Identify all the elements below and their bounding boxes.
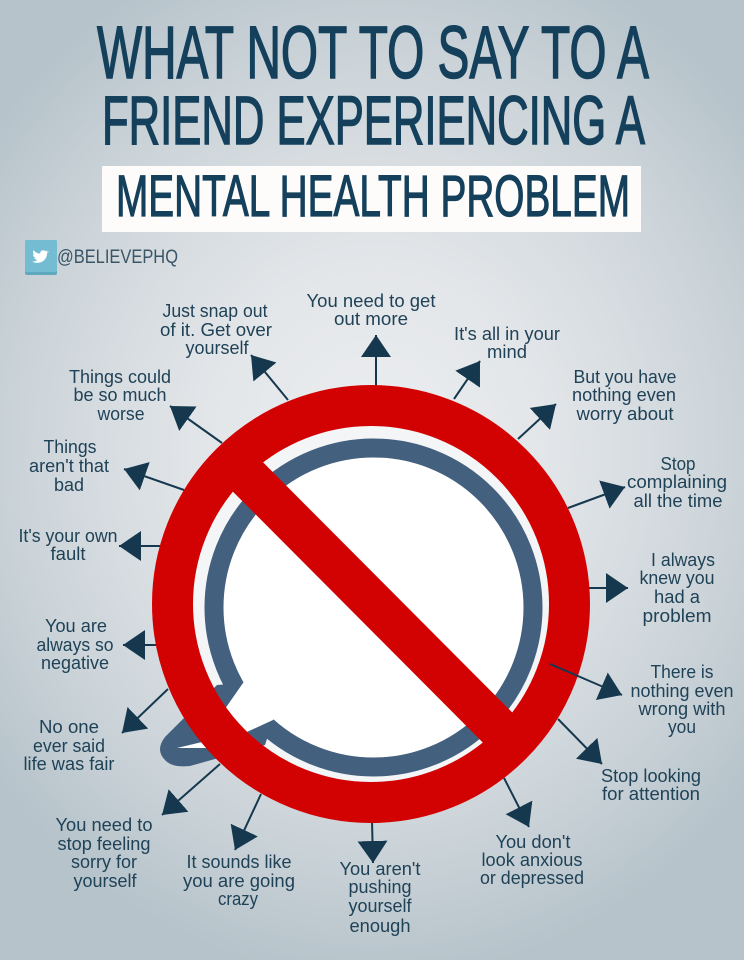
arrow: you need to get out more (375, 335, 377, 386)
speech bubble (160, 448, 533, 767)
arrow: sounds crazy (235, 794, 261, 850)
label: stop feeling sorry: sorry for (71, 851, 137, 872)
label: life was fair: ever said (33, 735, 105, 756)
label: always knew: had a (654, 586, 701, 607)
label: always negative: always so (36, 634, 114, 655)
label: your own fault: fault (50, 543, 86, 564)
label: stop looking for attention: for attention (602, 783, 700, 804)
arrow: aren't pushing (372, 820, 373, 863)
arrow: aren't that bad (124, 469, 184, 490)
arrow: all in your mind (454, 361, 480, 399)
label: going crazy: you are going (183, 870, 295, 891)
label: stop feeling sorry: You need to (56, 814, 152, 835)
arrow: could be worse (170, 406, 222, 443)
label: stop complaining: all the time (634, 490, 722, 511)
arrow: always negative (123, 644, 157, 646)
label: nothing wrong: There is (650, 661, 714, 682)
label: always knew: problem (642, 605, 712, 626)
arrow: stop looking for attention (558, 719, 602, 764)
labels (18, 290, 734, 936)
prohibition sign and speech bubble (160, 406, 570, 802)
arrows radiating from sign (119, 335, 628, 863)
label: aren't pushing: yourself (348, 895, 412, 916)
icon: twitter bird (25, 240, 57, 275)
label: nothing wrong: you (668, 716, 696, 737)
arrow: stop feeling sorry (162, 764, 220, 815)
label: just snap out of it: yourself (186, 337, 249, 358)
label: just snap out of it: Just snap out (162, 300, 268, 321)
label: aren't pushing: enough (350, 915, 410, 936)
label: things could be worse: Things could (69, 366, 171, 387)
label: nothing wrong: nothing even (630, 680, 734, 701)
label: aren't pushing: You aren't (340, 858, 420, 879)
label: stop complaining: complaining (627, 471, 727, 492)
label: stop complaining: Stop (660, 453, 696, 474)
sign backing (186, 419, 556, 789)
label: don't look anxious: You don't (496, 831, 570, 852)
label: stop feeling sorry: stop feeling (58, 833, 150, 854)
arrow: life was fair (122, 689, 168, 733)
label: don't look anxious: look anxious (482, 849, 582, 870)
label: life was fair: life was fair (24, 753, 114, 774)
arrow: stop complaining (568, 487, 625, 508)
label: your own fault: It's your own (18, 525, 118, 546)
label: always knew: knew you (640, 567, 714, 588)
label: things aren't that bad: Things (44, 436, 96, 457)
label: going crazy: crazy (218, 888, 259, 909)
label: nothing wrong: wrong with (638, 698, 726, 719)
label: nothing to worry about: nothing even (572, 384, 676, 405)
label: going crazy: It sounds like (186, 851, 292, 872)
arrow: don't look anxious (504, 778, 529, 827)
label: need to get out more: out more (334, 308, 408, 329)
label: always negative: negative (41, 652, 109, 673)
title (97, 11, 649, 159)
label: always knew: I always (651, 549, 715, 570)
label: just snap out of it: of it. Get over (160, 319, 272, 340)
label: things aren't that bad: aren't that (29, 455, 109, 476)
label: nothing to worry about: worry about (575, 403, 674, 424)
label: stop feeling sorry: yourself (74, 870, 137, 891)
label: need to get out more: You need to get (306, 290, 436, 311)
label: always negative: You are (45, 615, 107, 636)
arrow: always knew (589, 587, 628, 589)
arrow: nothing wrong with you (550, 664, 622, 695)
label: stop looking for attention: Stop looking (601, 765, 701, 786)
twitter handle: @BELIEVEPHQ (57, 247, 178, 268)
label: things aren't that bad: bad (54, 474, 84, 495)
label: don't look anxious: or depressed (480, 867, 584, 888)
label: all in your mind: mind (487, 341, 527, 362)
label: things could be worse: worse (97, 403, 144, 424)
label: all in your mind: It's all in your (454, 323, 560, 344)
arrow: nothing to worry about (518, 404, 556, 439)
arrow: your own fault (119, 545, 160, 547)
arrow: snap out of it (251, 355, 288, 400)
label: aren't pushing: pushing (348, 876, 412, 897)
label: life was fair: No one (39, 716, 99, 737)
label: nothing to worry about: But you have (574, 366, 676, 387)
red ring (172, 406, 570, 802)
label: things could be worse: be so much (74, 384, 166, 405)
red slash (240, 469, 503, 733)
